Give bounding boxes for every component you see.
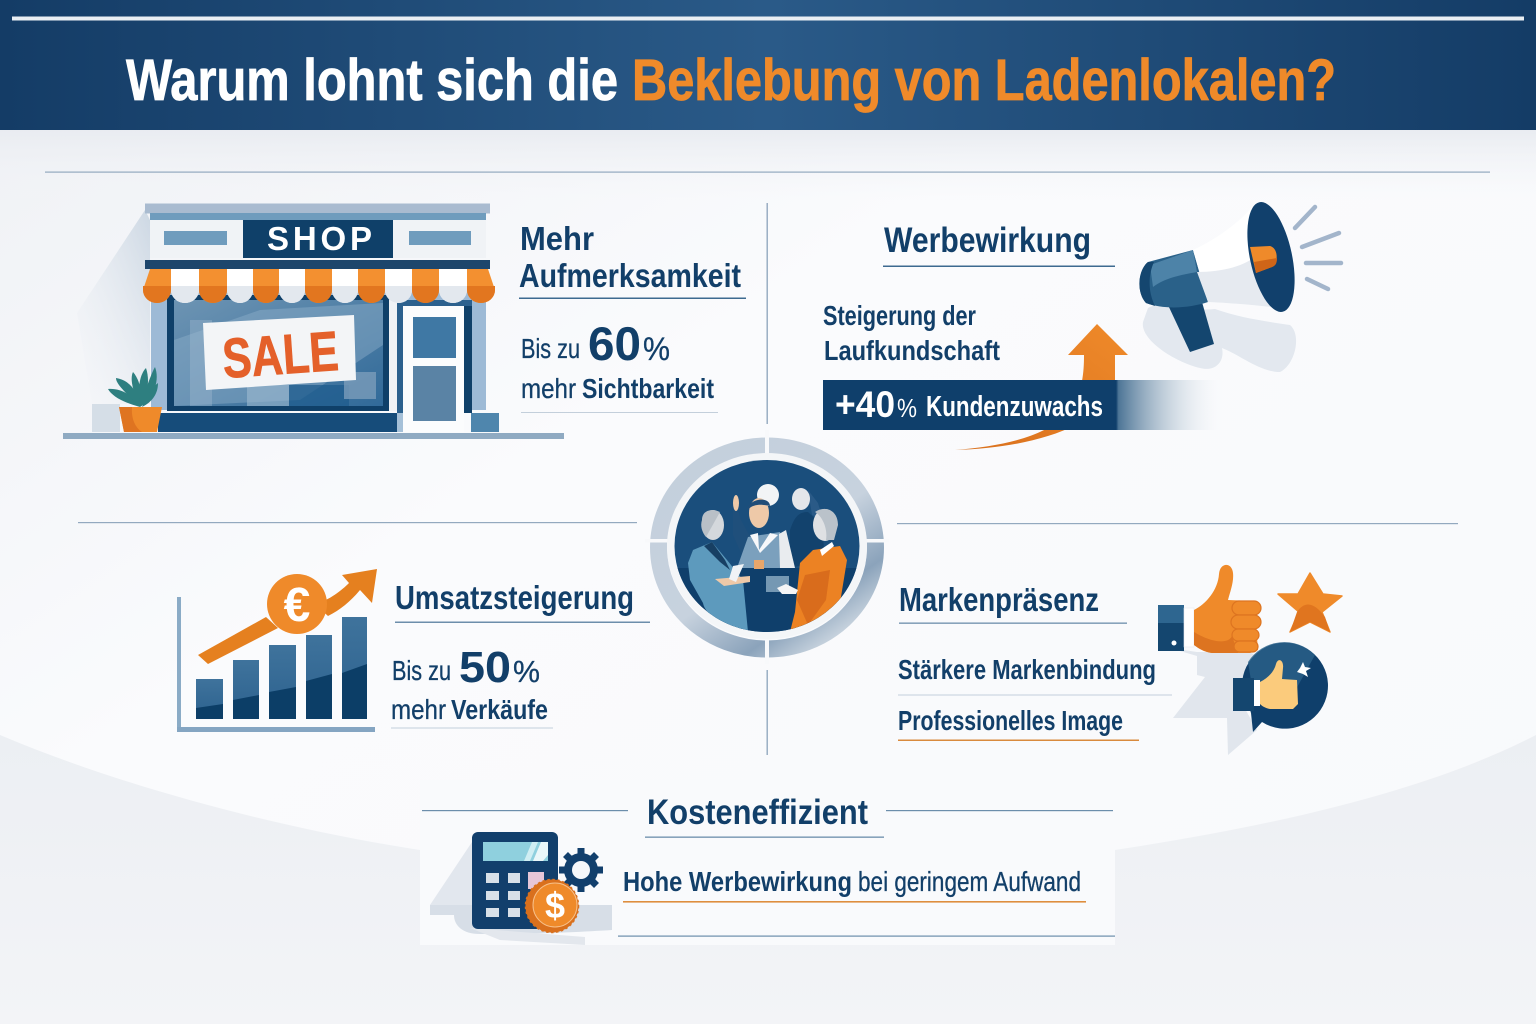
heading: Mehr Aufmerksamkeit (519, 220, 746, 299)
panel: Kosteneffizient (422, 793, 1115, 945)
arrow: growth (955, 324, 1128, 450)
icon: shop front: SHOP (267, 220, 372, 257)
icon: thumbs up, star and speech bubble (1158, 565, 1342, 755)
stat: 60%: mehr (521, 373, 576, 404)
heading: Markenpräsenz: Markenpräsenz (899, 581, 1099, 618)
icon: shop front: SALE (220, 319, 340, 390)
panel: Markenpräsenz (898, 565, 1342, 755)
heading: Werbewirkung: Werbewirkung (884, 221, 1091, 260)
banner: +40% Kundenzuwachs (823, 380, 1225, 430)
panel: Mehr Aufmerksamkeit (519, 220, 746, 413)
icon: shop front (63, 204, 564, 439)
stat: 50%: mehr (391, 694, 446, 725)
title: Beklebung von Ladenlokalen? (632, 48, 1336, 113)
panel: Umsatzsteigerung (177, 569, 650, 732)
text: Stärkere Markenbindung: Stärkere Markenbindung (898, 654, 1156, 685)
heading: Umsatzsteigerung: Umsatzsteigerung (395, 579, 634, 616)
stat: 60%: 60 (588, 317, 641, 370)
text: Hohe Werbewirkung bei geringem Aufwand (618, 866, 1115, 937)
icon: bar chart with euro coin: € (284, 579, 310, 632)
icon: megaphone (1139, 198, 1341, 372)
stat: 50%: 50 (459, 643, 511, 692)
heading: Kosteneffizient: Kosteneffizient (647, 793, 868, 832)
banner: +40% Kundenzuwachs: Kundenzuwachs (926, 391, 1103, 423)
stat: 50%: % (513, 654, 540, 689)
stat: 50%: Verkäufe (451, 694, 548, 725)
lower background curves (0, 735, 1536, 1024)
stat: 50% (391, 643, 553, 728)
center illustration: team in segmented ring (645, 430, 889, 664)
title: Warum lohnt sich die (126, 48, 618, 113)
stat: 50%: Bis zu (392, 655, 451, 686)
icon: calculator, gear and dollar coin: $ (545, 885, 565, 926)
stat: 60%: Sichtbarkeit (582, 373, 714, 404)
section dividers (45, 172, 1490, 755)
title (126, 48, 1336, 113)
stat: 60%: Bis zu (521, 333, 580, 364)
icon: calculator, gear and dollar coin (430, 832, 612, 945)
text: Hohe Werbewirkung bei geringem Aufwand: bei geringem Aufwand (858, 866, 1081, 897)
icon: bar chart with euro coin (177, 569, 377, 732)
text: Professionelles Image: Professionelles Image (898, 705, 1123, 736)
panel: Werbewirkung (823, 198, 1341, 450)
heading: Mehr Aufmerksamkeit: Aufmerksamkeit (519, 257, 741, 294)
text: Steigerung der Laufkundschaft (823, 300, 1000, 366)
text: Steigerung der Laufkundschaft: Laufkundschaft (824, 335, 1000, 366)
banner: +40% Kundenzuwachs: % (897, 393, 917, 423)
text: Steigerung der Laufkundschaft: Steigerung der (823, 300, 976, 331)
banner: +40% Kundenzuwachs: +40 (835, 384, 895, 425)
header band (0, 0, 1536, 130)
stat: 60% (521, 317, 718, 413)
heading: Mehr Aufmerksamkeit: Mehr (520, 220, 594, 257)
text: Hohe Werbewirkung bei geringem Aufwand: Hohe Werbewirkung (623, 866, 852, 897)
stat: 60%: % (643, 331, 670, 367)
